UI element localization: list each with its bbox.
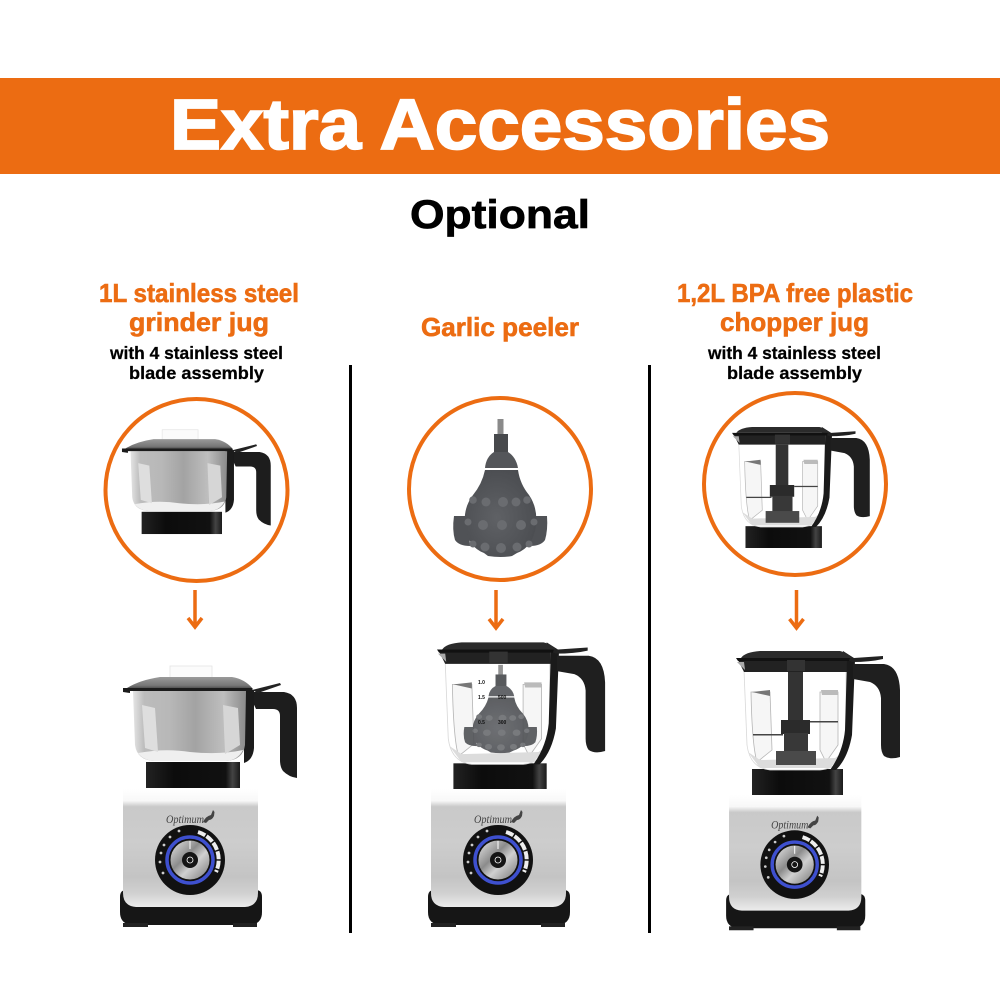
blender with garlic peeler jug: 1.5: [478, 695, 485, 701]
blender with grinder jug: [120, 666, 297, 927]
right column description: with 4 stainless steel: [707, 343, 881, 363]
banner: Extra Accessories: Extra Accessories: [170, 86, 830, 165]
circle: garlic peeler accessory: [409, 398, 591, 580]
left column heading: 1L stainless steel: [99, 278, 299, 308]
right column description: [707, 343, 881, 383]
circle: chopper jug accessory: [704, 393, 886, 575]
arrow: grinder to blender: [188, 590, 202, 627]
subtitle: Optional: Optional: [410, 193, 590, 237]
left column heading: grinder jug: [129, 307, 269, 337]
blender with garlic peeler jug: 1.0: [478, 680, 485, 686]
right column description: blade assembly: [727, 363, 862, 383]
banner: Extra Accessories: [0, 78, 1000, 174]
right column heading: chopper jug: [720, 307, 869, 337]
arrow: peeler to blender: [489, 590, 503, 628]
left column description: blade assembly: [129, 363, 264, 383]
centre column heading: Garlic peeler: [421, 312, 579, 342]
blender with garlic peeler jug: 0.5: [478, 720, 485, 726]
left column heading: [99, 278, 299, 337]
circle: grinder jug accessory: [106, 399, 288, 581]
arrow: chopper to blender: [790, 590, 804, 628]
right column heading: 1,2L BPA free plastic: [677, 278, 913, 308]
blender with garlic peeler jug: 300: [498, 720, 507, 726]
left column description: [109, 343, 283, 383]
blender with chopper jug: [726, 651, 900, 930]
left column description: with 4 stainless steel: [109, 343, 283, 363]
blender with garlic peeler jug: 500: [498, 695, 507, 701]
right column heading: [677, 278, 913, 337]
blender with garlic peeler jug: [428, 642, 605, 927]
